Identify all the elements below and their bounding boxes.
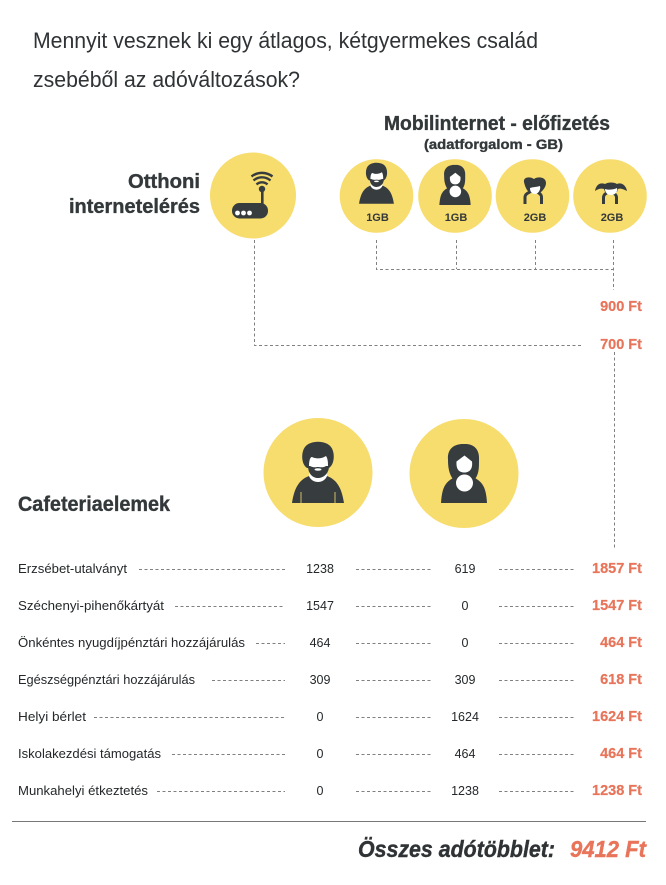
row: Erzsébet-utalványt: 1238 [306,562,334,576]
row: Önkéntes nyugdíjpénztári hozzájárulás [18,635,642,651]
row: Erzsébet-utalványt: 619 [455,562,475,576]
icon: mother 1GB: 1GB [445,212,467,224]
row: Széchenyi-pihenőkártyát [18,598,642,614]
heading: mobile internet: (adatforgalom - GB) [424,136,563,152]
row: Egészségpénztári hozzájárulás: 309 [455,673,475,687]
heading: cafeteria: Cafeteriaelemek [18,493,170,516]
row: Helyi bérlet: 0 [317,710,324,724]
total: 9412 Ft [570,836,647,862]
row: Helyi bérlet [18,709,642,725]
row: Erzsébet-utalványt: 1857 Ft [592,561,642,577]
row: Önkéntes nyugdíjpénztári hozzájárulás: Önkéntes nyugdíjpénztári hozzájárulás [18,635,245,650]
title: zsebéből az adóváltozások? [33,67,300,92]
row: Egészségpénztári hozzájárulás [18,672,642,688]
row: Széchenyi-pihenőkártyát: 1547 Ft [592,598,642,614]
value: mobile cost: 900 Ft [600,299,642,315]
heading: mobile internet [384,113,610,152]
row: Iskolakezdési támogatás: 464 [455,747,475,761]
heading: mobile internet: Mobilinternet - előfizetés [384,113,610,135]
row: Munkahelyi étkeztetés: 1238 Ft [592,783,642,799]
row: Munkahelyi étkeztetés: 1238 [451,784,479,798]
connector: home internet [254,240,583,346]
title [33,28,538,92]
icon: father large [264,418,372,527]
row: Iskolakezdési támogatás: 0 [317,747,324,761]
total: Összes adótöbblet: [358,836,555,862]
icon: father 1GB: 1GB [366,212,389,224]
row: Széchenyi-pihenőkártyát: 0 [462,599,469,613]
title: Mennyit vesznek ki egy átlagos, kétgyermekes család [33,28,538,53]
row: Helyi bérlet: 1624 Ft [592,709,642,725]
icon: father 1GB [340,159,413,233]
icon: mother large [410,419,518,528]
row: Önkéntes nyugdíjpénztári hozzájárulás: 464 Ft [600,635,642,651]
row: Egészségpénztári hozzájárulás: Egészségpénztári hozzájárulás [18,672,195,687]
row: Széchenyi-pihenőkártyát: Széchenyi-pihenőkártyát [18,598,164,613]
icon: daughter 2GB: 2GB [601,212,623,224]
row: Erzsébet-utalványt [18,561,642,577]
row: Munkahelyi étkeztetés: Munkahelyi étkeztetés [18,783,149,798]
value: home internet cost: 700 Ft [600,337,642,353]
row: Iskolakezdési támogatás: 464 Ft [600,746,642,762]
heading: home internet [69,171,200,218]
row: Helyi bérlet: 1624 [451,710,479,724]
row: Munkahelyi étkeztetés [18,783,642,799]
row: Önkéntes nyugdíjpénztári hozzájárulás: 0 [462,636,469,650]
row: Iskolakezdési támogatás: Iskolakezdési támogatás [18,746,161,761]
row: Önkéntes nyugdíjpénztári hozzájárulás: 464 [310,636,330,650]
row: Helyi bérlet: Helyi bérlet [18,709,86,724]
icon: mother 1GB [418,159,492,233]
row: Iskolakezdési támogatás [18,746,642,762]
icon: router [210,152,296,238]
heading: home internet: internetelérés [69,196,200,218]
icon: son 2GB [496,159,569,233]
icon: daughter 2GB [573,159,647,233]
row: Erzsébet-utalványt: Erzsébet-utalványt [18,561,127,576]
row: Egészségpénztári hozzájárulás: 618 Ft [600,672,642,688]
icon: son 2GB: 2GB [524,212,546,224]
row: Egészségpénztári hozzájárulás: 309 [310,673,330,687]
connector: to cafeteria total [614,352,616,550]
row: Munkahelyi étkeztetés: 0 [317,784,324,798]
connector: mobile subscriptions [376,240,614,290]
heading: home internet: Otthoni [128,171,200,193]
row: Széchenyi-pihenőkártyát: 1547 [306,599,334,613]
